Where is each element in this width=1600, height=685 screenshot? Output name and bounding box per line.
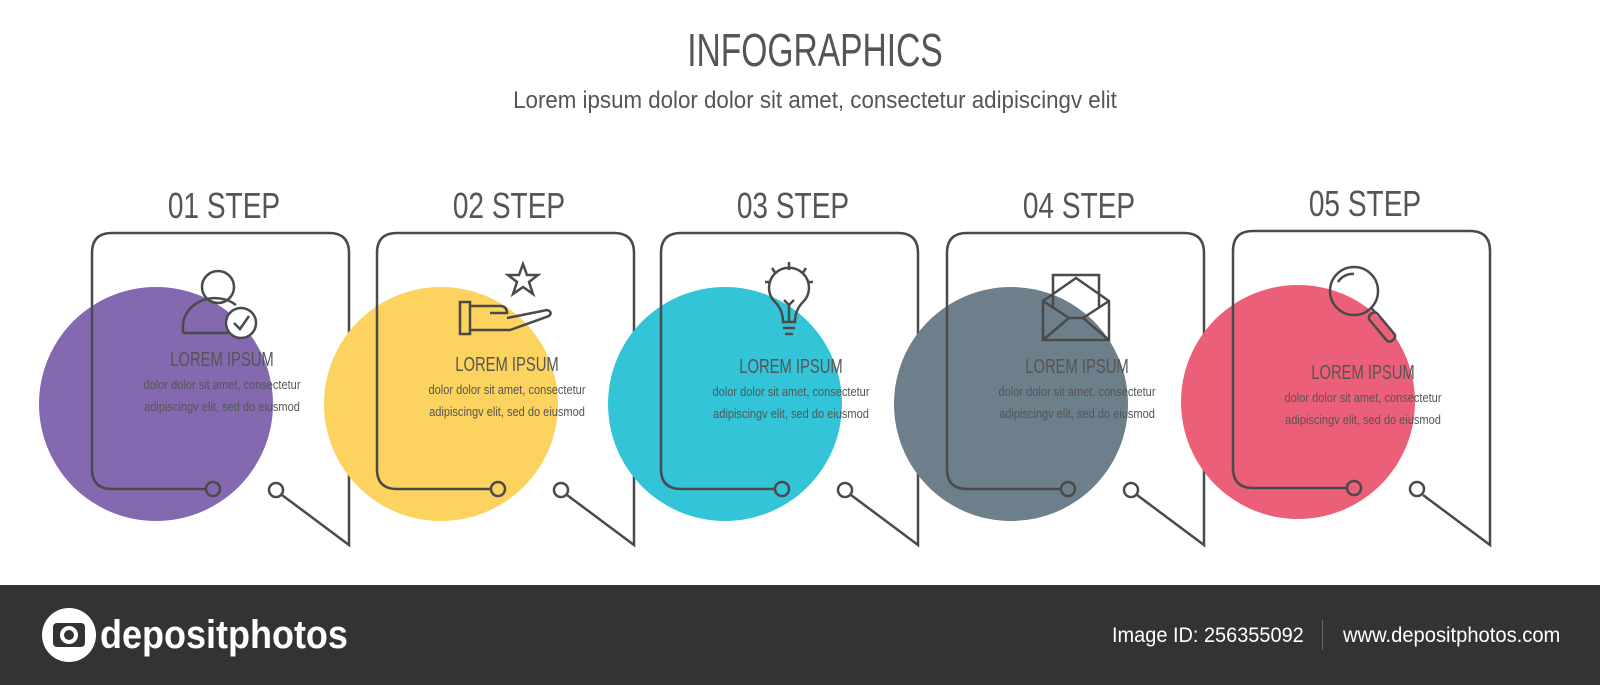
circle: purple (39, 287, 273, 521)
text block: dolor dolor sit amet, consectetur (143, 377, 301, 392)
brand name: depositphotos (100, 613, 348, 657)
text block (428, 353, 586, 419)
icon: user check (183, 271, 256, 338)
text block: adipiscingv elit, sed do eiusmod (429, 404, 585, 419)
heading: 01 STEP: 01 STEP (168, 186, 280, 226)
heading: 02 STEP: 02 STEP (453, 186, 565, 226)
icon: magnifier (1330, 267, 1397, 343)
circle: teal (608, 287, 842, 521)
footer bar (0, 585, 1600, 685)
text block: dolor dolor sit amet, consectetur (1284, 390, 1442, 405)
step 5 (1181, 184, 1490, 545)
subtitle: Lorem ipsum dolor dolor sit amet, consectetur adipiscingv elit (513, 86, 1117, 113)
circle: grey (894, 287, 1128, 521)
step 3 (608, 186, 918, 545)
text block: adipiscingv elit, sed do eiusmod (1285, 412, 1441, 427)
text block (998, 355, 1156, 421)
icon: envelope (1043, 275, 1109, 340)
text block: LOREM IPSUM (739, 355, 843, 378)
step 2 (324, 186, 634, 545)
frame (947, 233, 1204, 545)
frame (92, 233, 349, 545)
text block: LOREM IPSUM (1311, 361, 1415, 384)
text block: dolor dolor sit amet, consectetur (712, 384, 870, 399)
icon: camera logo (42, 608, 96, 662)
text block: LOREM IPSUM (1025, 355, 1129, 378)
heading: 05 STEP: 05 STEP (1309, 184, 1421, 224)
text block: adipiscingv elit, sed do eiusmod (144, 399, 300, 414)
step 1 (39, 186, 349, 545)
step 4 (894, 186, 1204, 545)
image id: Image ID: 256355092 (1112, 624, 1304, 647)
text block: LOREM IPSUM (455, 353, 559, 376)
text block: adipiscingv elit, sed do eiusmod (713, 406, 869, 421)
heading: 03 STEP: 03 STEP (737, 186, 849, 226)
website: www.depositphotos.com (1342, 624, 1560, 647)
text block (143, 348, 301, 414)
title: INFOGRAPHICS (687, 25, 943, 76)
frame (1233, 231, 1490, 545)
text block: LOREM IPSUM (170, 348, 274, 371)
circle: red (1181, 285, 1415, 519)
text block: dolor dolor sit amet, consectetur (428, 382, 586, 397)
icon: hand with star (460, 264, 551, 334)
icon: light bulb (765, 262, 813, 334)
circle: yellow (324, 287, 558, 521)
frame (377, 233, 634, 545)
text block: adipiscingv elit, sed do eiusmod (999, 406, 1155, 421)
heading: 04 STEP: 04 STEP (1023, 186, 1135, 226)
text block (712, 355, 870, 421)
text block: dolor dolor sit amet, consectetur (998, 384, 1156, 399)
frame (661, 233, 918, 545)
text block (1284, 361, 1442, 427)
